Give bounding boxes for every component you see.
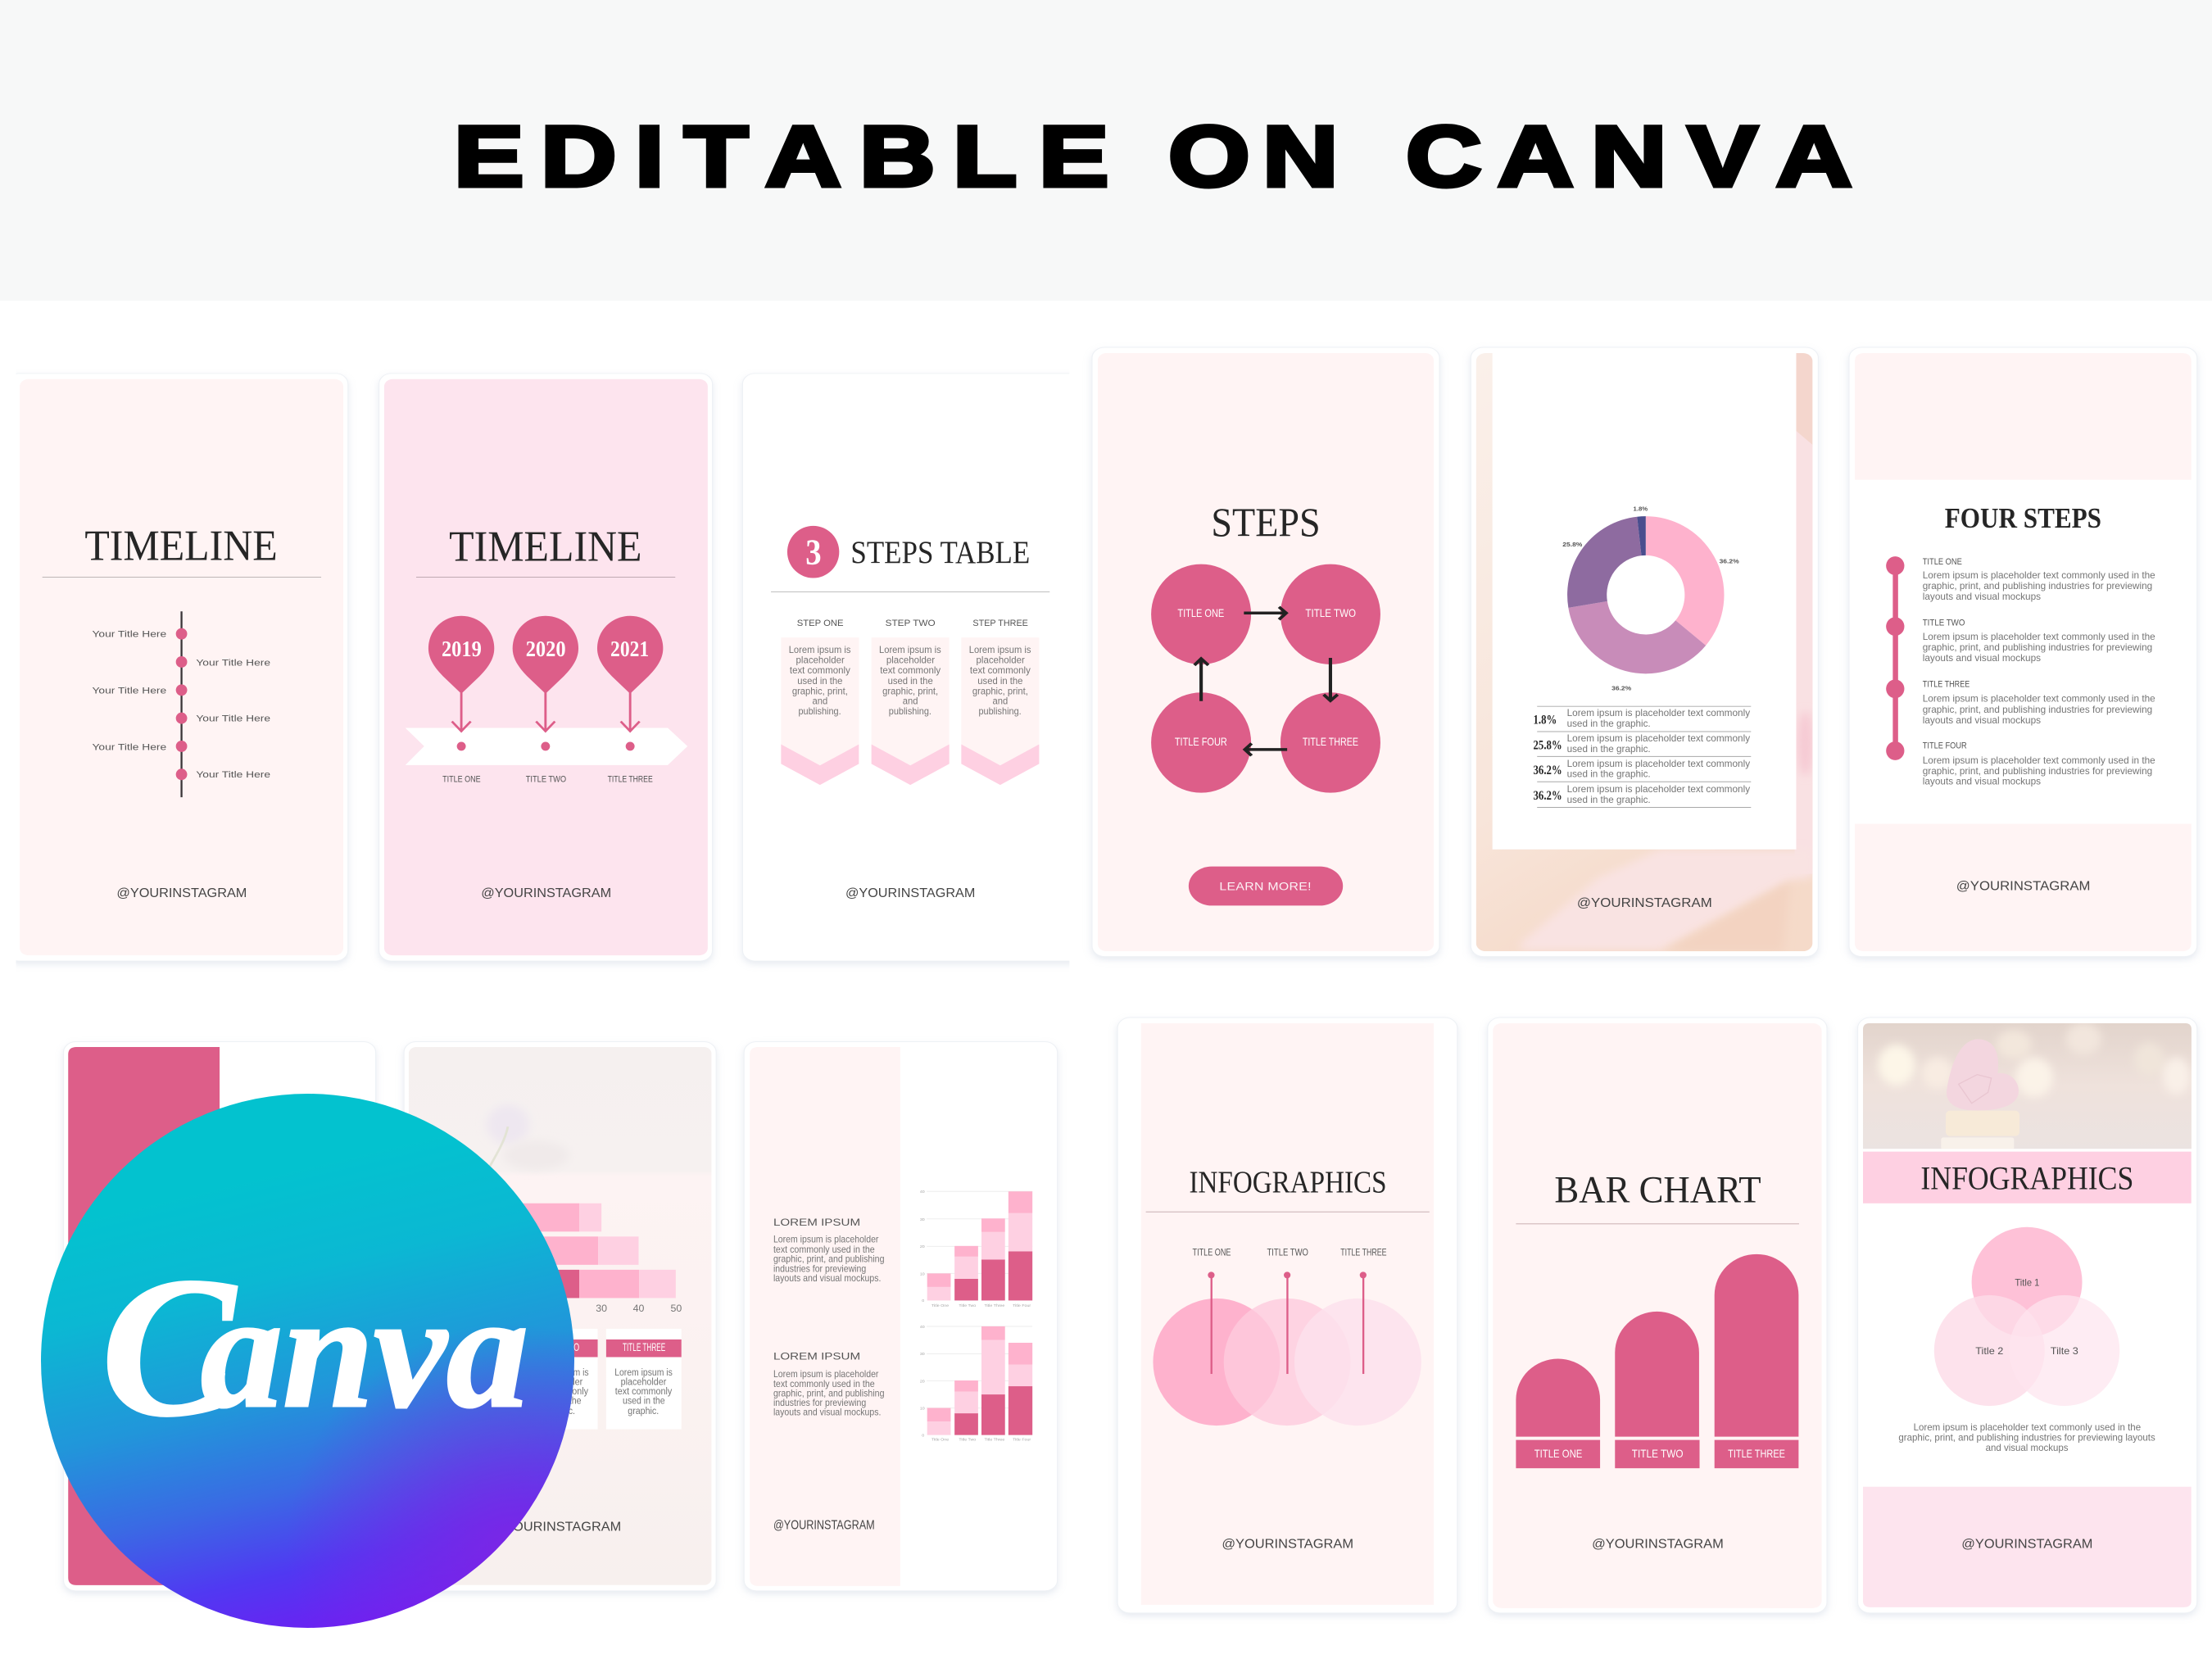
venn diagram xyxy=(1934,1227,2119,1406)
legend table: Lorem ipsum is placeholder text commonly xyxy=(1567,783,1751,795)
pin labels: TITLE TWO xyxy=(526,774,566,784)
card background xyxy=(384,379,708,955)
step four text: graphic, print, and publishing industries for previewing xyxy=(1923,765,2152,777)
stacked chart one: 20 xyxy=(920,1244,925,1249)
panel group: pink sidebar and horizontal bars xyxy=(63,1042,716,1591)
paragraph: graphic, print, and publishing industries for previewing layouts xyxy=(1898,1432,2155,1443)
column: step one: Lorem ipsum is xyxy=(789,644,851,655)
step four text: TITLE FOUR xyxy=(1923,740,1967,750)
ribbon xyxy=(406,728,687,765)
donut chart: 25.8% xyxy=(1562,542,1583,548)
petal photo background xyxy=(1476,353,1814,951)
stacked chart two: Title Three xyxy=(985,1438,1005,1442)
instagram handle: @YOURINSTAGRAM xyxy=(773,1518,875,1532)
stacked chart two: 20 xyxy=(920,1380,925,1384)
text block one: layouts and visual mockups. xyxy=(773,1272,881,1284)
legend table: 25.8% xyxy=(1534,737,1562,752)
heading: FOUR STEPS xyxy=(1945,503,2101,534)
panel: overlapping circles infographic xyxy=(1117,1018,1457,1613)
pin labels xyxy=(442,774,653,784)
pin 2019: 2019 xyxy=(442,637,482,661)
box: title three: used in the xyxy=(623,1394,665,1406)
axis labels xyxy=(596,1303,682,1314)
instagram handle: @YOURINSTAGRAM xyxy=(491,1520,621,1534)
column titles: TITLE ONE xyxy=(1193,1247,1231,1258)
stacked chart two: 0 xyxy=(922,1434,924,1438)
card background xyxy=(1493,1023,1822,1608)
step one text: TITLE ONE xyxy=(1923,556,1962,567)
paragraph xyxy=(1898,1421,2155,1453)
donut chart: 1.8% xyxy=(1634,505,1648,512)
text block two: graphic, print, and publishing xyxy=(773,1388,884,1398)
legend table: used in the graphic. xyxy=(1567,768,1651,779)
bar: title three: TITLE THREE xyxy=(1728,1448,1785,1461)
instagram handle: @YOURINSTAGRAM xyxy=(845,886,975,900)
stacked chart one: 40 xyxy=(920,1190,925,1194)
card background xyxy=(409,1047,711,1585)
vertical timeline xyxy=(176,611,187,797)
canva logo xyxy=(41,1094,574,1628)
instagram handle: @YOURINSTAGRAM xyxy=(1956,879,2091,893)
step four text: Lorem ipsum is placeholder text commonly used in the xyxy=(1923,755,2155,766)
pin 2019 xyxy=(428,616,494,750)
text block one xyxy=(773,1217,884,1284)
column titles: TITLE THREE xyxy=(1340,1247,1387,1258)
box: title two: graphic. xyxy=(544,1405,575,1416)
circle: title one: TITLE ONE xyxy=(1177,608,1224,619)
pin 2021 xyxy=(597,616,663,750)
panel: stacked bar charts card xyxy=(744,1042,1058,1591)
column: step one: placeholder xyxy=(796,654,845,665)
panel: four steps xyxy=(1849,347,2197,957)
text block two: LOREM IPSUM xyxy=(773,1351,860,1362)
panel: donut chart card xyxy=(1471,347,1818,957)
instagram handle: @YOURINSTAGRAM xyxy=(481,886,611,900)
box: title two: TITLE TWO xyxy=(541,1342,579,1354)
column: step three: used in the xyxy=(977,675,1022,687)
column: step one xyxy=(781,618,859,785)
text block two: text commonly used in the xyxy=(773,1378,875,1389)
circle: title two xyxy=(1281,564,1380,664)
box: title three: TITLE THREE xyxy=(623,1342,665,1354)
pin labels: TITLE ONE xyxy=(442,774,481,784)
timeline labels: Your Title Here xyxy=(196,657,270,668)
box: title three: Lorem ipsum is xyxy=(614,1367,673,1378)
arrow: one to two xyxy=(1244,607,1286,619)
card background xyxy=(1141,1023,1434,1605)
pin 2020 xyxy=(513,616,578,750)
overlapping circles xyxy=(1153,1299,1421,1426)
card background xyxy=(20,379,343,955)
legend table: Lorem ipsum is placeholder text commonly xyxy=(1567,758,1751,769)
timeline labels: Your Title Here xyxy=(196,713,270,723)
panel: timeline pins xyxy=(379,374,713,961)
panel: pink sidebar card xyxy=(63,1042,376,1591)
column: step one: STEP ONE xyxy=(797,618,844,628)
bar: title three xyxy=(1715,1254,1798,1468)
pin lines xyxy=(1208,1271,1367,1374)
venn diagram: Title 1 xyxy=(2015,1277,2039,1288)
stacked chart one: Title Three xyxy=(985,1303,1005,1308)
pin 2021: 2021 xyxy=(610,637,649,661)
venn diagram: Tilte 3 xyxy=(2051,1346,2078,1357)
paragraph: and visual mockups xyxy=(1986,1442,2069,1453)
text block one: industries for previewing xyxy=(773,1262,866,1274)
axis labels: 40 xyxy=(633,1303,644,1314)
stacked chart two: 40 xyxy=(920,1325,925,1330)
stacked chart two: 10 xyxy=(920,1407,925,1411)
stacked chart two xyxy=(920,1325,1032,1442)
button: LEARN MORE! xyxy=(1219,882,1311,893)
column: step two: placeholder xyxy=(886,654,936,665)
box: title three: text commonly xyxy=(615,1385,673,1397)
paragraph: Lorem ipsum is placeholder text commonly used in the xyxy=(1914,1421,2141,1433)
step four text: layouts and visual mockups xyxy=(1923,776,2042,786)
circle: title four: TITLE FOUR xyxy=(1175,737,1227,749)
top band xyxy=(1855,353,2192,480)
timeline labels xyxy=(93,628,270,780)
column titles xyxy=(1193,1247,1387,1258)
stepper xyxy=(1886,556,1904,760)
timeline labels: Your Title Here xyxy=(93,685,166,696)
instagram handle: @YOURINSTAGRAM xyxy=(1577,895,1712,910)
timeline labels: Your Title Here xyxy=(196,769,270,780)
pink sidebar xyxy=(68,1047,220,1585)
column: step two: used in the xyxy=(888,675,933,687)
venn diagram: Title 2 xyxy=(1975,1346,2003,1357)
column: step two: publishing. xyxy=(889,705,931,717)
column: step one: publishing. xyxy=(798,705,841,717)
heading: INFOGRAPHICS xyxy=(1920,1161,2133,1197)
heading: INFOGRAPHICS xyxy=(1189,1165,1387,1199)
legend table: 1.8% xyxy=(1534,712,1557,727)
step one text: graphic, print, and publishing industries for previewing xyxy=(1923,580,2152,592)
instagram handle: @YOURINSTAGRAM xyxy=(116,886,247,900)
stacked chart one: 30 xyxy=(920,1217,925,1222)
text block one: graphic, print, and publishing xyxy=(773,1253,884,1264)
panel group: stacked bars and infographics xyxy=(744,1018,1457,1613)
panel group: donut and four steps xyxy=(1471,347,2197,957)
horizontal bars xyxy=(470,1203,676,1298)
donut chart: 36.2% xyxy=(1720,558,1739,564)
stacked chart one: 10 xyxy=(920,1272,925,1276)
step two text: layouts and visual mockups xyxy=(1923,652,2042,664)
legend table: Lorem ipsum is placeholder text commonly xyxy=(1567,732,1751,744)
column: step two: graphic, print, xyxy=(882,685,938,696)
pin 2020: 2020 xyxy=(526,637,566,661)
text block two: industries for previewing xyxy=(773,1397,866,1408)
stacked chart one: 0 xyxy=(922,1299,924,1303)
stacked chart two: Title Four xyxy=(1013,1438,1031,1442)
panel: timeline cards row one xyxy=(7,374,713,961)
timeline labels: Your Title Here xyxy=(93,628,166,639)
panel: steps cycle xyxy=(1092,347,1439,957)
axis labels: 30 xyxy=(596,1303,607,1314)
heading: TIMELINE xyxy=(449,523,642,571)
box: title two: Lorem ipsum is xyxy=(531,1367,589,1378)
step two text: TITLE TWO xyxy=(1923,618,1965,628)
stacked chart one: Title Two xyxy=(959,1303,976,1308)
bar: title two: TITLE TWO xyxy=(1632,1448,1684,1461)
column: step three: placeholder xyxy=(977,654,1025,665)
number badge xyxy=(787,526,839,578)
circle: title three xyxy=(1281,692,1380,793)
column: step one: and xyxy=(812,696,827,706)
heading: STEPS xyxy=(1211,500,1321,545)
legend table: used in the graphic. xyxy=(1567,743,1651,755)
step three text: TITLE THREE xyxy=(1923,678,1969,689)
stacked chart two: 30 xyxy=(920,1352,925,1357)
bottom band xyxy=(1855,823,2192,951)
text block two: Lorem ipsum is placeholder xyxy=(773,1368,879,1380)
panel: horizontal bar chart card xyxy=(404,1042,716,1591)
logo circle xyxy=(41,1094,574,1628)
legend table: used in the graphic. xyxy=(1567,794,1651,805)
column: step two: Lorem ipsum is xyxy=(879,644,941,655)
column: step two: and xyxy=(903,696,918,706)
column: step three: and xyxy=(992,696,1008,706)
logo wordmark: anva xyxy=(201,1261,528,1442)
step one text: Lorem ipsum is placeholder text commonly used in the xyxy=(1923,569,2155,581)
column: step three: STEP THREE xyxy=(972,618,1028,628)
panel group: bar chart and venn xyxy=(1488,1018,2197,1613)
circle: title three: TITLE THREE xyxy=(1303,737,1358,749)
legend table: 36.2% xyxy=(1534,763,1562,777)
column: step three: text commonly xyxy=(970,664,1031,676)
box: title three: graphic. xyxy=(628,1405,659,1416)
circle: title two: TITLE TWO xyxy=(1305,608,1356,619)
instagram handle: @YOURINSTAGRAM xyxy=(1592,1537,1724,1551)
donut chart xyxy=(1562,505,1739,691)
step one text: layouts and visual mockups xyxy=(1923,591,2042,602)
panel: three steps table xyxy=(742,374,1108,961)
step three text: layouts and visual mockups xyxy=(1923,714,2042,726)
donut chart: 36.2% xyxy=(1611,685,1632,691)
step two text: Lorem ipsum is placeholder text commonly used in the xyxy=(1923,631,2155,642)
column: step three xyxy=(961,618,1039,785)
heading: TIMELINE xyxy=(84,522,278,570)
instagram handle: @YOURINSTAGRAM xyxy=(1222,1537,1353,1551)
step one text xyxy=(1923,556,2155,602)
axis labels: 50 xyxy=(671,1303,682,1314)
number badge: 3 xyxy=(805,531,822,573)
column: step two xyxy=(872,618,950,785)
text block one: text commonly used in the xyxy=(773,1244,875,1255)
legend table: Lorem ipsum is placeholder text commonly xyxy=(1567,707,1751,718)
photo: marshmallow heart xyxy=(1863,1023,2192,1149)
box: title two: text commonly xyxy=(532,1385,589,1397)
column: step three: graphic, print, xyxy=(972,685,1028,696)
stacked chart one: Title Four xyxy=(1013,1303,1031,1308)
legend table: 36.2% xyxy=(1534,787,1562,803)
text block two xyxy=(773,1351,884,1417)
bar: title one: TITLE ONE xyxy=(1534,1448,1583,1461)
stacked chart two: Title Two xyxy=(959,1438,976,1442)
bar: title one xyxy=(1516,1359,1600,1468)
button xyxy=(1189,867,1343,905)
pin labels: TITLE THREE xyxy=(608,774,653,784)
instagram handle: @YOURINSTAGRAM xyxy=(1961,1537,2092,1551)
box: title two: used in the xyxy=(539,1394,581,1406)
column: step three: publishing. xyxy=(978,705,1022,717)
timeline labels: Your Title Here xyxy=(93,741,166,752)
box: title two xyxy=(523,1329,598,1430)
circle: title four xyxy=(1151,692,1251,793)
step four text xyxy=(1923,740,2155,786)
legend table: used in the graphic. xyxy=(1567,718,1651,729)
stacked chart one: Title One xyxy=(931,1303,949,1308)
text block one: LOREM IPSUM xyxy=(773,1217,860,1228)
column: step one: graphic, print, xyxy=(792,685,848,696)
text block one: Lorem ipsum is placeholder xyxy=(773,1233,879,1244)
legend table xyxy=(1534,706,1751,808)
text block two: layouts and visual mockups. xyxy=(773,1407,881,1417)
box: title two: placeholder xyxy=(537,1376,583,1387)
column titles: TITLE TWO xyxy=(1267,1247,1308,1258)
step two text xyxy=(1923,618,2155,664)
bar: title two xyxy=(1615,1312,1700,1468)
column: step three: Lorem ipsum is xyxy=(969,644,1031,655)
circle: title one xyxy=(1151,564,1251,664)
panel: timeline vertical xyxy=(7,374,348,961)
box: title three: placeholder xyxy=(621,1376,667,1387)
column: step two: STEP TWO xyxy=(886,618,936,628)
card background xyxy=(1098,353,1434,951)
white content sheet xyxy=(1493,353,1796,850)
arrow: four to one xyxy=(1194,659,1208,701)
heading: STEPS TABLE xyxy=(850,535,1030,570)
box: title three xyxy=(606,1329,682,1430)
stacked chart two: Title One xyxy=(931,1438,949,1442)
panel: arched bar chart xyxy=(1488,1018,1827,1613)
title: EDITABLE ON CANVA xyxy=(454,108,1852,204)
heading band xyxy=(1863,1152,2192,1203)
step two text: graphic, print, and publishing industries for previewing xyxy=(1923,641,2152,653)
column: step two: text commonly xyxy=(880,664,941,676)
column: step one: text commonly xyxy=(790,664,850,676)
header band xyxy=(0,0,2212,301)
step three text: Lorem ipsum is placeholder text commonly used in the xyxy=(1923,693,2155,704)
stacked chart one xyxy=(920,1190,1032,1308)
logo wordmark: C xyxy=(102,1236,235,1457)
panel: venn infographic xyxy=(1858,1018,2197,1613)
left sidebar xyxy=(750,1047,900,1586)
step three text: graphic, print, and publishing industries for previewing xyxy=(1923,704,2152,715)
arrow: three to four xyxy=(1245,743,1287,755)
bottom band xyxy=(1863,1487,2192,1607)
panel group: steps cards xyxy=(742,347,1439,961)
column: step one: used in the xyxy=(797,675,842,687)
step three text xyxy=(1923,678,2155,726)
heading: BAR CHART xyxy=(1554,1168,1761,1211)
arrow: two to three xyxy=(1324,658,1338,700)
